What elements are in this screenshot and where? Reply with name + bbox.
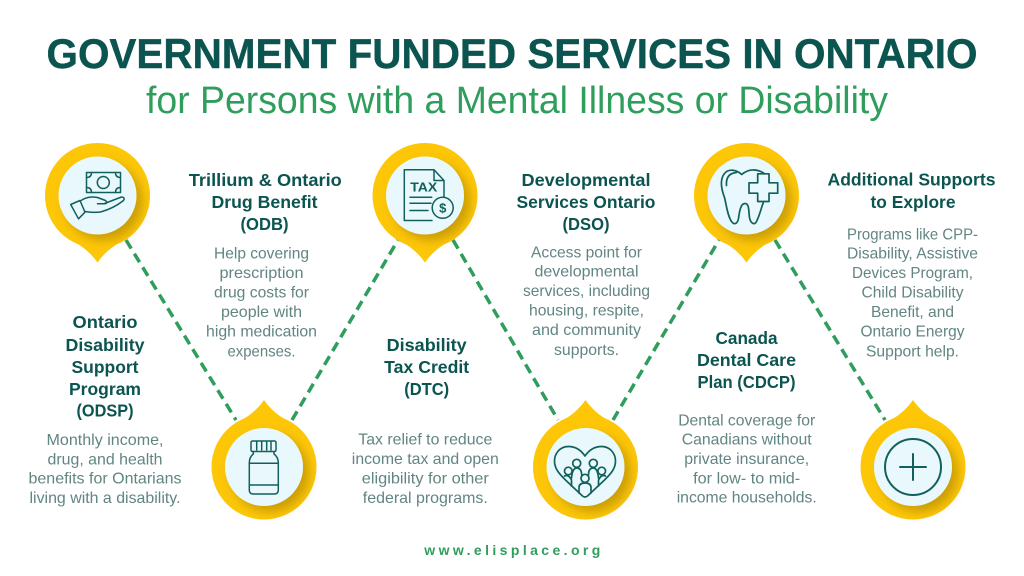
icon: tax form: $ [439, 200, 447, 216]
body: DTC: income tax and open [352, 451, 499, 468]
body: ODSP: Monthly income, [46, 432, 164, 449]
icon: tax form: TAX [410, 180, 438, 194]
text block: ODB [189, 170, 342, 360]
heading: CDCP: Dental Care [697, 350, 796, 370]
icon: tax form [404, 170, 453, 220]
body: DTC: eligibility for other [362, 470, 489, 487]
body: DTC [352, 431, 499, 507]
text block: ODSP [28, 312, 182, 507]
body: ODB: high medication [206, 324, 317, 341]
body: ODSP: living with a disability. [30, 490, 180, 507]
pin: family heart [533, 400, 638, 520]
body: DTC: federal programs. [363, 490, 488, 507]
heading: DTC: (DTC) [404, 379, 449, 399]
body: ODSP: drug, and health [48, 452, 162, 468]
icon: heart with family [554, 446, 616, 497]
heading: DSO [516, 170, 656, 234]
heading: DSO: Services Ontario [516, 192, 656, 212]
heading: ODB [189, 170, 342, 234]
icon: tooth [721, 170, 778, 224]
text block: DTC [352, 335, 499, 507]
heading: CDCP: Plan (CDCP) [698, 372, 796, 392]
body: Additional Supports: Benefit, and [871, 304, 954, 321]
body: ODB: expenses. [228, 344, 296, 360]
body: ODB: drug costs for [214, 285, 310, 302]
body: Additional Supports: Child Disability [862, 285, 964, 302]
heading: ODSP: Program [69, 379, 141, 399]
subtitle: for Persons with a Mental Illness or Disability [146, 80, 888, 122]
icon: plus in circle [885, 439, 941, 495]
heading: ODB: Trillium & Ontario [189, 170, 342, 190]
heading: CDCP: Canada [716, 328, 778, 348]
text block: Additional Supports [828, 170, 996, 360]
body: DSO: housing, respite, [529, 303, 644, 320]
body: Additional Supports: Disability, Assistive [847, 246, 978, 263]
body: ODSP: benefits for Ontarians [28, 470, 182, 488]
pin: cash in hand [45, 143, 150, 262]
heading: Additional Supports [828, 170, 996, 212]
body: ODB [206, 246, 317, 360]
pin: plus [860, 400, 966, 520]
text block: DSO [516, 170, 656, 359]
heading: ODSP: Disability [66, 335, 145, 355]
body: CDCP: income households. [677, 490, 817, 507]
body: DTC: Tax relief to reduce [358, 431, 492, 448]
body: Additional Supports: Ontario Energy [860, 324, 964, 341]
body: ODSP [28, 432, 182, 507]
icon: bottle [249, 441, 278, 494]
title: GOVERNMENT FUNDED SERVICES IN ONTARIO [46, 30, 978, 77]
heading: DTC [384, 335, 469, 399]
pin: medicine bottle [212, 400, 316, 520]
pin: tooth with cross [694, 143, 799, 262]
body: DSO: Access point for [531, 244, 643, 261]
heading: DTC: Disability [387, 335, 467, 355]
body: CDCP: private insurance, [684, 451, 809, 468]
body: CDCP: for low- to mid- [693, 470, 800, 487]
body: Additional Supports [847, 226, 978, 360]
body: DSO: and community [532, 322, 641, 339]
body: CDCP: Canadians without [682, 431, 812, 448]
heading: DSO: (DSO) [562, 214, 610, 234]
body: Additional Supports: Support help. [866, 343, 959, 360]
body: DSO: supports. [554, 342, 619, 359]
heading: ODB: Drug Benefit [212, 192, 318, 212]
body: DSO: services, including [523, 283, 650, 300]
heading: DTC: Tax Credit [384, 357, 469, 377]
heading: ODB: (ODB) [240, 214, 288, 234]
dashed connector zigzag [126, 240, 885, 420]
heading: ODSP: Ontario [72, 312, 138, 332]
heading: ODSP: (ODSP) [76, 400, 134, 420]
body: Additional Supports: Devices Program, [852, 265, 973, 282]
website footer: www.elisplace.org [423, 542, 604, 558]
heading: Additional Supports: to Explore [870, 192, 956, 212]
text block: CDCP [677, 328, 817, 507]
body: CDCP: Dental coverage for [678, 412, 816, 429]
heading: DSO: Developmental [522, 170, 650, 190]
icon: money hand [71, 172, 124, 219]
body: Additional Supports: Programs like CPP- [847, 226, 978, 243]
body: ODB: people with [221, 304, 302, 321]
body: CDCP [677, 412, 817, 507]
pin: tax document [372, 143, 478, 262]
body: ODB: Help covering [214, 246, 309, 263]
body: ODB: prescription [220, 265, 304, 282]
body: DSO: developmental [534, 264, 638, 281]
heading: CDCP [697, 328, 796, 392]
heading: ODSP: Support [72, 357, 139, 377]
body: DSO [523, 244, 650, 359]
heading: Additional Supports: Additional Supports [828, 170, 996, 190]
heading: ODSP [66, 312, 145, 420]
